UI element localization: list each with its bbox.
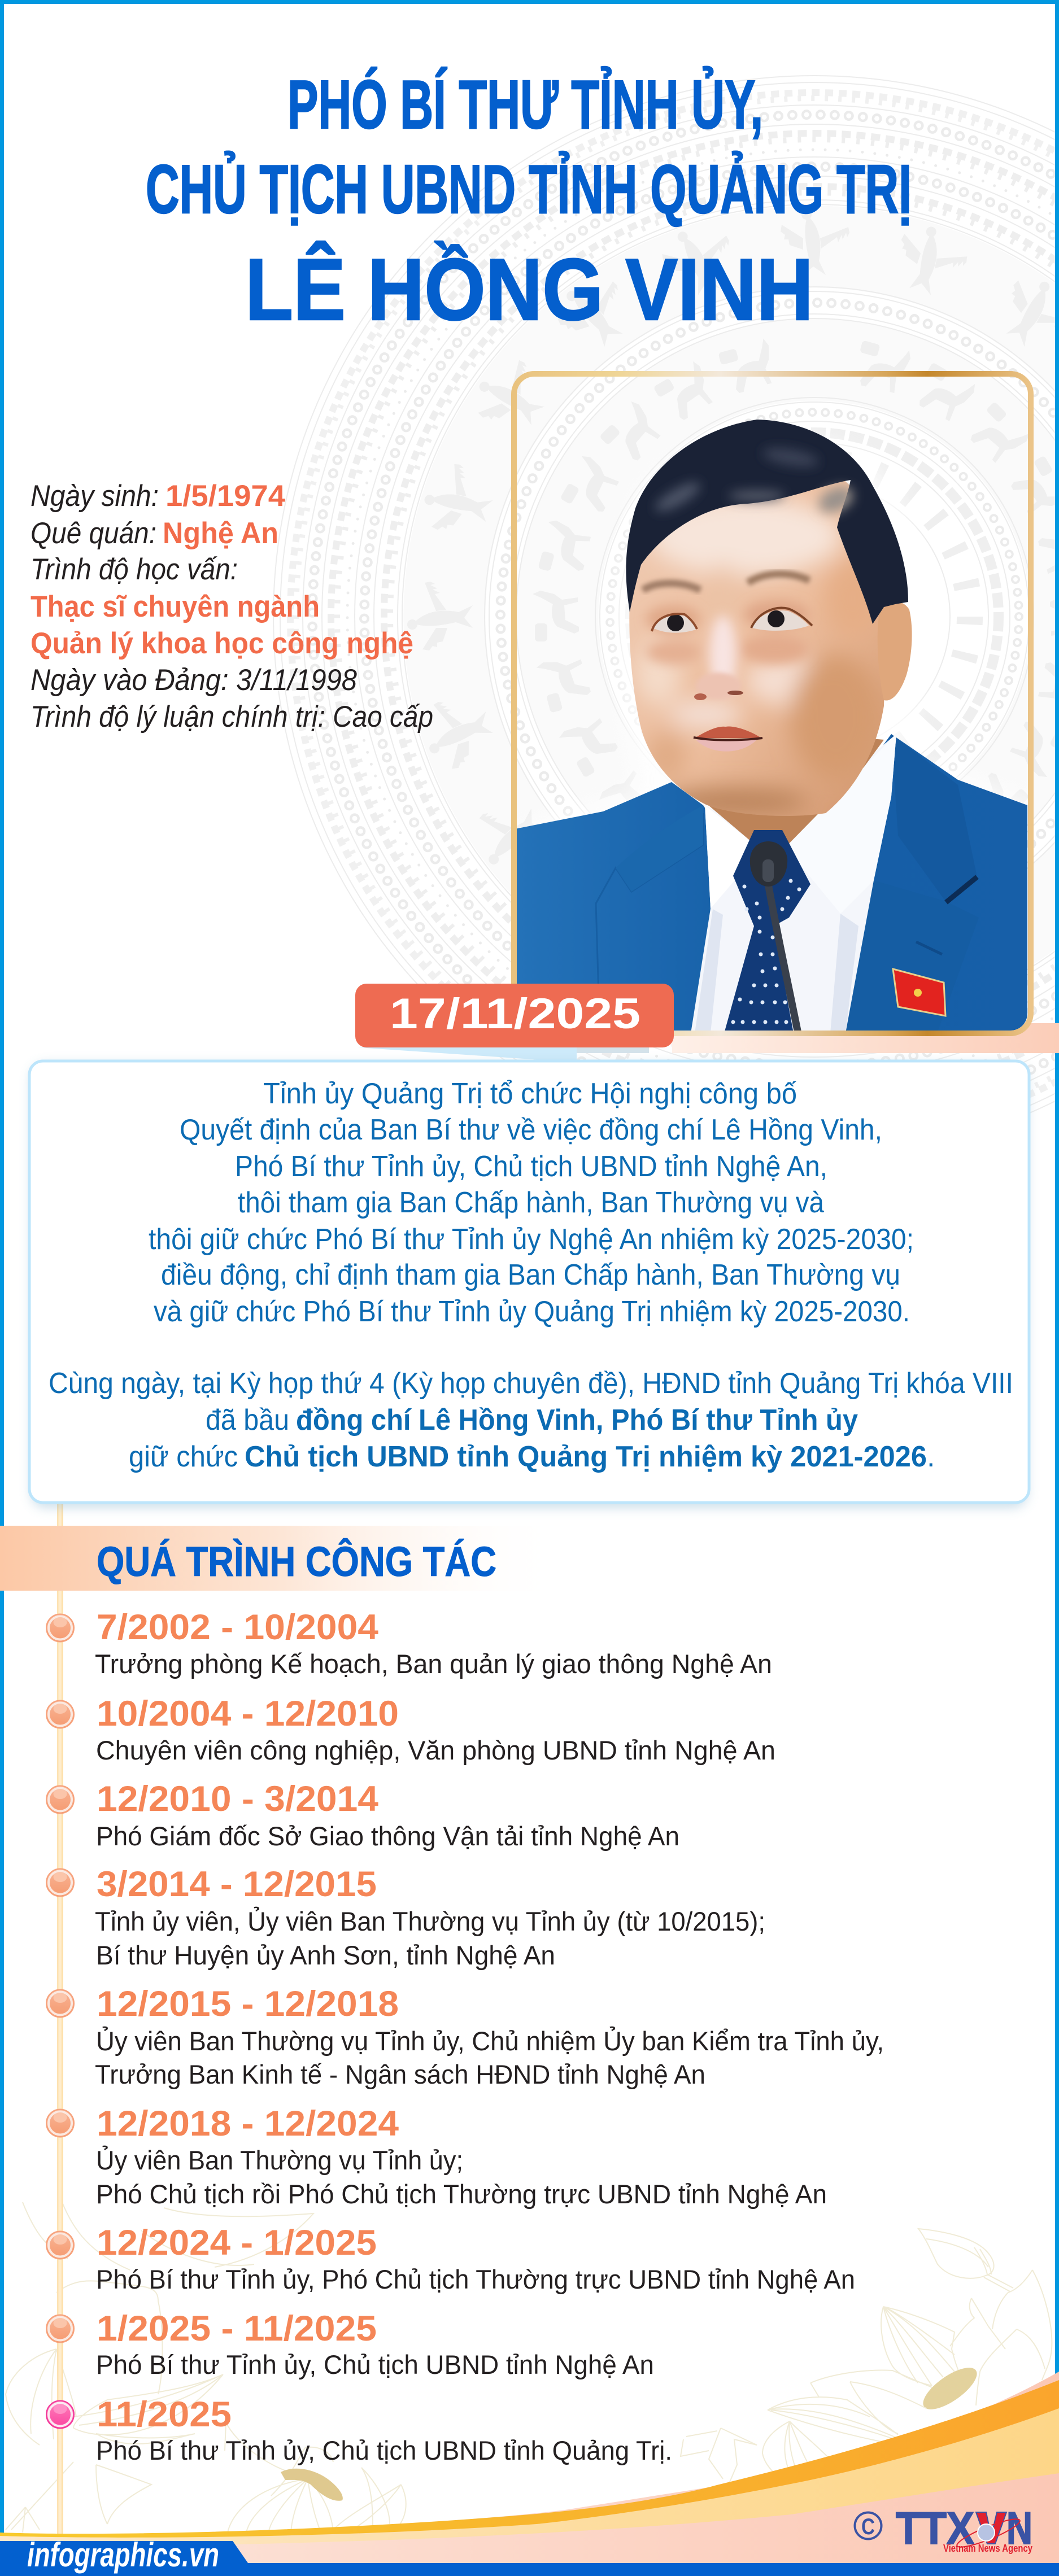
icon: copyright: [855, 2513, 881, 2539]
announcement paragraph 1: [149, 1077, 914, 1328]
portrait frame: [514, 374, 1031, 1033]
entry 2014-2015: [46, 1865, 765, 1970]
icon: copyright: C: [861, 2514, 875, 2539]
entry 2018-2024: Ủy viên Ban Thường vụ Tỉnh ủy;: [96, 2145, 463, 2175]
entry 2014-2015: 3/2014 - 12/2015: [97, 1865, 377, 1904]
ear: [878, 601, 912, 701]
entry 2014-2015: Tỉnh ủy viên, Ủy viên Ban Thường vụ Tỉnh ủy (từ 10/2015);: [95, 1906, 765, 1936]
logo: TTXVN: TTX: [896, 2503, 974, 2554]
entry 2010-2014: [46, 1779, 679, 1851]
announcement paragraph 1: thôi tham gia Ban Chấp hành, Ban Thường vụ và: [238, 1186, 824, 1219]
political theory level: Trình độ lý luận chính trị: Cao cấp: [30, 700, 433, 733]
entry 2024-2025: 12/2024 - 1/2025: [97, 2223, 377, 2263]
icon: lotus seed pod left: [281, 2469, 343, 2501]
entry 2004-2010: 10/2004 - 12/2010: [97, 1694, 399, 1734]
timeline rail: [57, 1504, 63, 2537]
face: [621, 452, 892, 824]
entry 2018-2024: [46, 2104, 827, 2209]
icon: lotus seed pod right: [917, 2360, 983, 2417]
entry 2025: Phó Bí thư Tỉnh ủy, Chủ tịch UBND tỉnh Nghệ An: [96, 2350, 654, 2379]
announcement paragraph 2: Chủ tịch UBND tỉnh Quảng Trị nhiệm kỳ 2021-2026: [245, 1440, 927, 1473]
announcement paragraph 2: [49, 1367, 1013, 1473]
entry 2002-2004: [46, 1608, 772, 1679]
microphone: [750, 841, 798, 1033]
announcement paragraph 1: Quyết định của Ban Bí thư về việc đồng chí Lê Hồng Vinh,: [180, 1114, 882, 1146]
shirt: [691, 734, 896, 1033]
timeline: [46, 1608, 884, 2465]
entry 2015-2018: 12/2015 - 12/2018: [97, 1984, 399, 2024]
education: [30, 553, 413, 660]
background: bronze drum pattern: [273, 76, 1059, 1158]
birth date: 1/5/1974: [165, 479, 286, 513]
hometown: Quê quán:: [30, 517, 156, 550]
background: lotus line art left: [6, 2202, 406, 2535]
entry 2002-2004: 7/2002 - 10/2004: [97, 1608, 378, 1647]
background: lotus line art right: [681, 2229, 1052, 2485]
announcement paragraph 1: thôi giữ chức Phó Bí thư Tỉnh ủy Nghệ An nhiệm kỳ 2025-2030;: [149, 1223, 914, 1256]
birth date: [30, 479, 286, 513]
entry 2004-2010: Chuyên viên công nghiệp, Văn phòng UBND tỉnh Nghệ An: [96, 1735, 775, 1765]
suit: [515, 734, 1027, 1033]
entry 2015-2018: Trưởng Ban Kinh tế - Ngân sách HĐND tỉnh Nghệ An: [95, 2059, 705, 2089]
announcement paragraph 1: Phó Bí thư Tỉnh ủy, Chủ tịch UBND tỉnh Nghệ An,: [235, 1150, 827, 1183]
logo: TTXVN: [855, 2503, 1032, 2554]
announcement paragraph 1: và giữ chức Phó Bí thư Tỉnh ủy Quảng Trị nhiệm kỳ 2025-2030.: [154, 1295, 910, 1328]
logo: TTXVN: Vietnam News Agency: [943, 2543, 1032, 2554]
icon: globe: [955, 2514, 1022, 2552]
entry 2004-2010: [46, 1694, 775, 1765]
date badge: 17/11/2025: [390, 990, 640, 1038]
announcement paragraph 2: giữ chức: [129, 1440, 238, 1473]
shadow under date badge: [358, 1047, 577, 1060]
portrait photo: [515, 420, 1034, 1033]
entry 2010-2014: Phó Giám đốc Sở Giao thông Vận tải tỉnh Nghệ An: [96, 1821, 679, 1851]
icon: delegate flag badge: [893, 969, 945, 1016]
entry 11/2025 current: [46, 2395, 672, 2465]
announcement paragraph 1: Tỉnh ủy Quảng Trị tổ chức Hội nghị công bố: [263, 1077, 797, 1110]
nose and mouth: [694, 673, 762, 752]
neck: [709, 739, 884, 844]
entry 2018-2024: 12/2018 - 12/2024: [97, 2104, 399, 2143]
entry 2014-2015: Bí thư Huyện ủy Anh Sơn, tỉnh Nghệ An: [96, 1940, 555, 1970]
entry 2015-2018: Ủy viên Ban Thường vụ Tỉnh ủy, Chủ nhiệm Ủy ban Kiểm tra Tỉnh ủy,: [96, 2026, 884, 2056]
hometown: Nghệ An: [163, 517, 278, 550]
heading band: career history: [0, 1526, 565, 1591]
hair: [626, 420, 908, 624]
birth date: Ngày sinh:: [30, 479, 159, 513]
logo: TTXVN: N: [1006, 2503, 1032, 2554]
collars: [705, 805, 752, 909]
announcement panel: [29, 1061, 1029, 1508]
title: [146, 66, 912, 338]
announcement paragraph 1: điều động, chỉ định tham gia Ban Chấp hành, Ban Thường vụ: [161, 1259, 900, 1291]
peach ribbon: [672, 1023, 1059, 1053]
announcement paragraph 2: đã bầu: [206, 1404, 289, 1437]
footer swoosh: [0, 2372, 1059, 2564]
footer bar: [0, 2536, 1059, 2576]
entry 2018-2024: Phó Chủ tịch rồi Phó Chủ tịch Thường trực UBND tỉnh Nghệ An: [96, 2179, 827, 2209]
entry 2015-2018: [46, 1984, 884, 2089]
education: Thạc sĩ chuyên ngành: [30, 590, 320, 623]
announcement paragraph 2: .: [927, 1440, 935, 1473]
entry 2024-2025: Phó Bí thư Tỉnh ủy, Phó Chủ tịch Thường trực UBND tỉnh Nghệ An: [96, 2264, 855, 2294]
entry 2002-2004: Trưởng phòng Kế hoạch, Ban quản lý giao thông Nghệ An: [95, 1649, 772, 1679]
entry 11/2025 current: Phó Bí thư Tỉnh ủy, Chủ tịch UBND tỉnh Quảng Trị.: [96, 2435, 672, 2465]
education: Trình độ học vấn:: [30, 553, 238, 586]
announcement paragraph 2: đồng chí Lê Hồng Vinh, Phó Bí thư Tỉnh ủy: [296, 1404, 858, 1437]
eyes: [652, 608, 812, 633]
profile facts: [30, 479, 433, 733]
heading band: career history: QUÁ TRÌNH CÔNG TÁC: [97, 1538, 496, 1585]
necktie: [724, 830, 810, 1033]
title line 1: PHÓ BÍ THƯ TỈNH ỦY,: [287, 66, 763, 143]
entry 2025: 1/2025 - 11/2025: [97, 2309, 377, 2348]
entry 2024-2025: [46, 2223, 855, 2294]
name: LÊ HỒNG VINH: [245, 241, 813, 338]
entry 2025: [46, 2309, 654, 2379]
entry 11/2025 current: 11/2025: [97, 2395, 232, 2434]
website label: infographics.vn: [27, 2536, 219, 2574]
date badge: [355, 984, 674, 1047]
hometown: [30, 517, 278, 550]
education: Quản lý khoa học công nghệ: [30, 627, 413, 660]
party date: Ngày vào Đảng: 3/11/1998: [30, 663, 357, 697]
eyebrows: [643, 574, 809, 590]
entry 2010-2014: 12/2010 - 3/2014: [97, 1779, 378, 1819]
